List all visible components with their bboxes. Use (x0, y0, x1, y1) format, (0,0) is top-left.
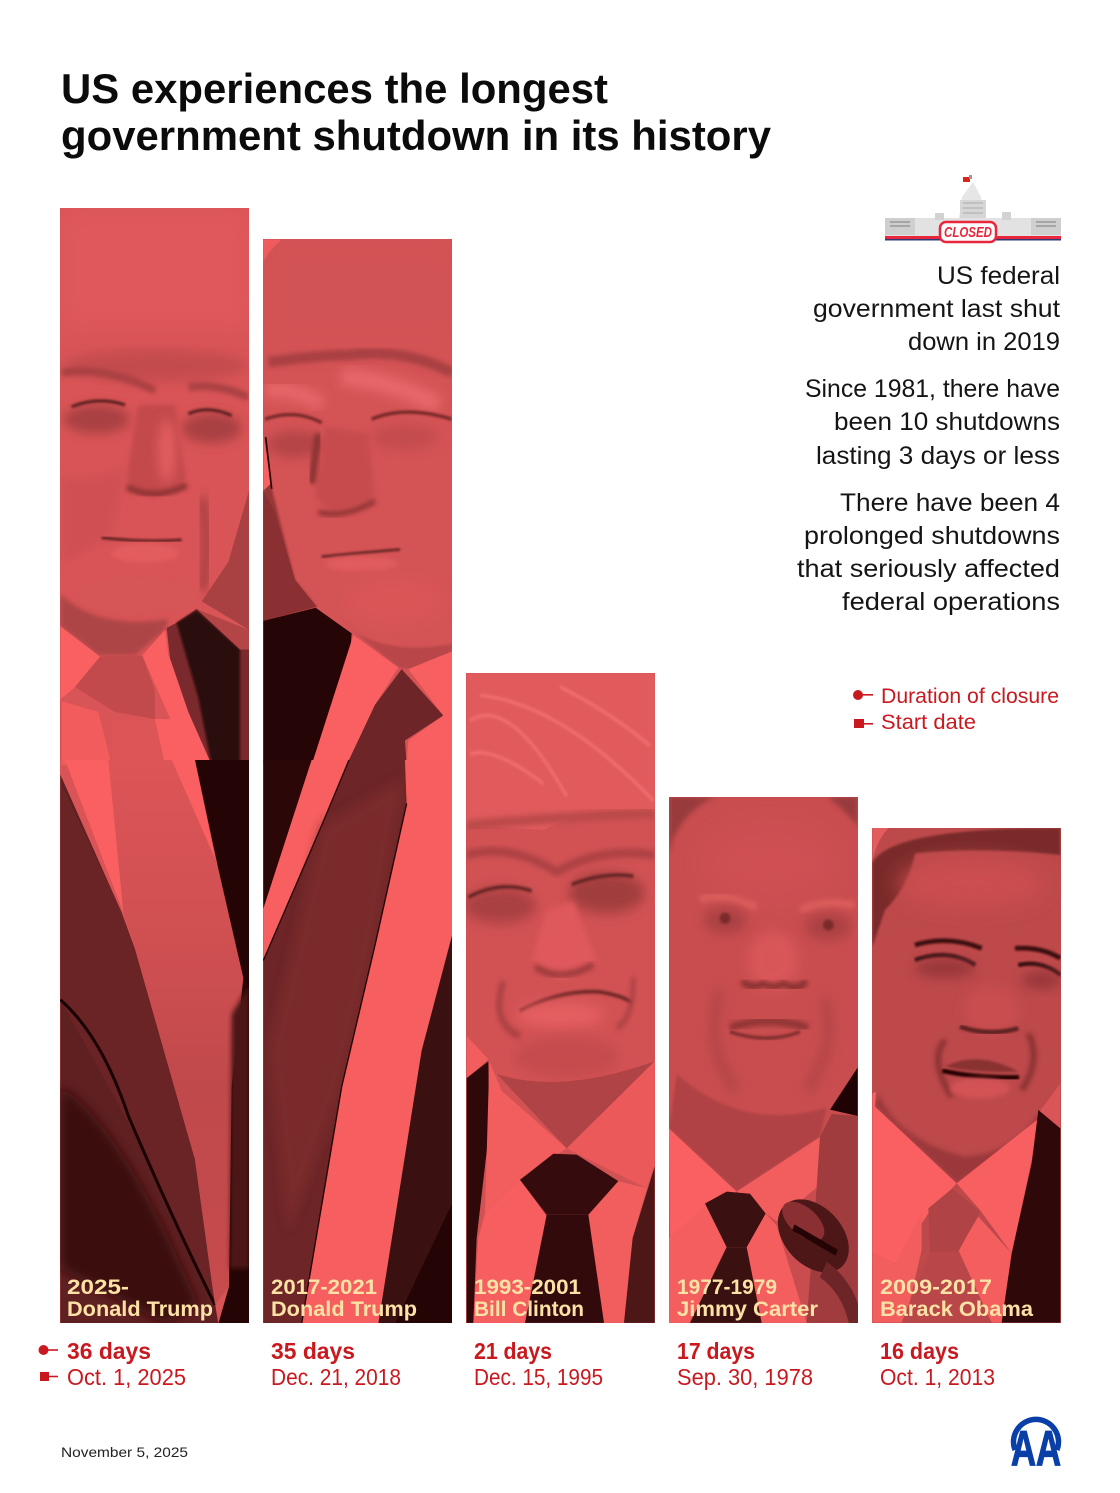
panel: Barack Obama (872, 828, 1062, 1323)
label: 2025 Donald Trump: Donald Trump (67, 1298, 213, 1321)
text block: short shutdowns: Since 1981, there have (805, 375, 1060, 403)
text block: 2019 shutdown (813, 262, 1060, 356)
stat: Trump 2018: 35 days (271, 1338, 355, 1364)
panel: Donald Trump 2017-2021 (263, 239, 453, 1324)
text block: prolonged shutdowns (797, 489, 1060, 616)
text block: prolonged shutdowns: prolonged shutdowns (804, 522, 1060, 550)
icon: AA logo (1011, 1419, 1061, 1476)
text block: short shutdowns: been 10 shutdowns (834, 408, 1060, 436)
stat: Carter: Sep. 30, 1978 (677, 1364, 813, 1390)
icon: closed Capitol building (885, 175, 1061, 242)
date: November 5, 2025 (61, 1444, 188, 1460)
label: 1993-2001 Bill Clinton (474, 1276, 584, 1321)
label: 2025 Donald Trump (67, 1276, 213, 1321)
stat: Trump 2025: 36 days (67, 1338, 151, 1364)
label: 2009-2017 Barack Obama: Barack Obama (880, 1298, 1033, 1321)
panel: Jimmy Carter (669, 796, 859, 1326)
title: government shutdown in its history (61, 112, 772, 159)
legend (853, 685, 1059, 734)
stat: Trump 2025 (38, 1338, 186, 1390)
label: 1993-2001 Bill Clinton: Bill Clinton (474, 1298, 584, 1321)
stat: Trump 2018 (271, 1338, 401, 1390)
title: US experiences the longest (61, 65, 608, 112)
title (61, 65, 772, 159)
label: 1977-1979 Jimmy Carter (677, 1276, 818, 1321)
label: 2009-2017 Barack Obama: 2009-2017 (880, 1276, 992, 1299)
panel: Bill Clinton (463, 673, 655, 1323)
label: 2025 Donald Trump: 2025- (67, 1276, 129, 1299)
stat: Obama: 16 days (880, 1338, 959, 1364)
stat: Clinton: 21 days (474, 1338, 552, 1364)
text block: 2019 shutdown: US federal (937, 262, 1060, 290)
stat: Obama (880, 1338, 995, 1390)
label: 2017-2021 Donald Trump: Donald Trump (271, 1298, 417, 1321)
text block: 2019 shutdown: down in 2019 (908, 328, 1060, 356)
label: 2017-2021 Donald Trump: 2017-2021 (271, 1276, 377, 1299)
text block: prolonged shutdowns: that seriously affected (797, 555, 1060, 583)
stat: Obama: Oct. 1, 2013 (880, 1364, 995, 1390)
legend: Duration of closure (881, 685, 1059, 708)
text block: prolonged shutdowns: There have been 4 (840, 489, 1060, 517)
stat: Trump 2018: Dec. 21, 2018 (271, 1364, 401, 1390)
label: 1977-1979 Jimmy Carter: Jimmy Carter (677, 1298, 818, 1321)
stat: Trump 2025: Oct. 1, 2025 (67, 1364, 186, 1390)
stat: Clinton (474, 1338, 603, 1390)
label: 2009-2017 Barack Obama (880, 1276, 1033, 1321)
icon: AA logo: AA (1011, 1422, 1061, 1476)
stat: Clinton: Dec. 15, 1995 (474, 1364, 603, 1390)
text block: 2019 shutdown: government last shut (813, 295, 1060, 323)
stat: Carter (677, 1338, 813, 1390)
text block: short shutdowns: lasting 3 days or less (816, 442, 1060, 470)
text block: prolonged shutdowns: federal operations (842, 588, 1060, 616)
text block: short shutdowns (805, 375, 1060, 470)
label: 1977-1979 Jimmy Carter: 1977-1979 (677, 1276, 777, 1299)
label: 2017-2021 Donald Trump (271, 1276, 417, 1321)
label: 1993-2001 Bill Clinton: 1993-2001 (474, 1276, 581, 1299)
stat: Carter: 17 days (677, 1338, 755, 1364)
legend: Start date (881, 711, 976, 734)
panel: Donald Trump 2025 (60, 208, 250, 1324)
icon: closed Capitol building: CLOSED (944, 224, 992, 241)
